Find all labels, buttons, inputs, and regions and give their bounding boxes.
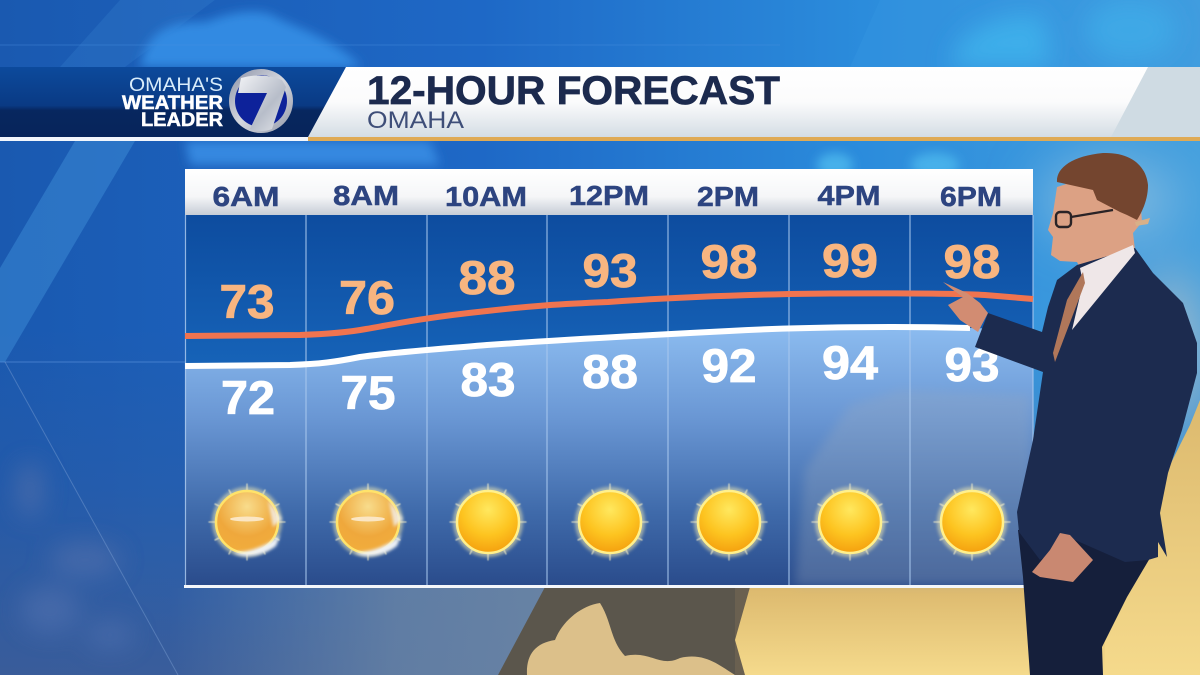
- title: 12-HOUR FORECAST: [367, 69, 780, 113]
- high temperatures: [220, 234, 1000, 328]
- table header: 6PM: [940, 181, 1002, 212]
- table header: 6AM: [212, 181, 280, 212]
- banner: station logo panel: [0, 67, 346, 141]
- high line: [185, 293, 1033, 336]
- presenter: lower hand: [1032, 533, 1093, 582]
- background: lower left clouds: [16, 462, 134, 649]
- low temperature band: [185, 327, 1033, 585]
- table header: 4PM: [818, 180, 880, 211]
- icon: sun 6PM: [934, 484, 1010, 560]
- presenter: earpiece: [1135, 218, 1150, 226]
- presenter: legs: [1018, 520, 1150, 675]
- presenter: shirt collar: [1072, 245, 1135, 330]
- table header: 2PM: [697, 181, 759, 212]
- presenter: suit jacket: [975, 248, 1197, 562]
- station logo text: OMAHA'S: [129, 75, 223, 96]
- low temperatures: 92: [702, 339, 756, 392]
- low temperatures: 72: [221, 371, 275, 424]
- background: gray lower band: [170, 588, 545, 675]
- low temperatures: 94: [822, 336, 878, 389]
- table header: 10AM: [445, 181, 527, 212]
- icon: sun 4PM: [812, 484, 888, 560]
- high temperature band: [185, 215, 1033, 366]
- icon: mostly sunny 8AM: [330, 484, 406, 560]
- low line: [185, 327, 970, 366]
- subtitle: OMAHA: [367, 107, 464, 134]
- low temperatures: 93: [944, 338, 1000, 391]
- icon: sun 10AM: [450, 484, 526, 560]
- low temperatures: 88: [582, 345, 638, 398]
- high temperatures: 73: [220, 275, 274, 328]
- high temperatures: 93: [582, 244, 638, 297]
- presenter: hair: [1057, 153, 1148, 220]
- table header: [185, 169, 1033, 215]
- icon: mostly sunny 6AM: [209, 484, 285, 560]
- presenter: pointing hand: [943, 282, 988, 332]
- banner: title panel: [308, 67, 1200, 137]
- cloud tint in band: [795, 390, 1033, 585]
- forecast table: [184, 169, 1033, 588]
- background: upper clouds: [140, 12, 440, 165]
- background: diagonal light stripes: [0, 141, 135, 362]
- bottom border: [184, 585, 1024, 588]
- presenter: face and neck: [1048, 175, 1142, 268]
- low temperatures: 75: [340, 366, 396, 419]
- table header: 12PM: [569, 180, 649, 211]
- channel 7 logo: [229, 69, 293, 133]
- high temperatures: 76: [339, 271, 395, 324]
- background: golden clouds: [498, 400, 1200, 675]
- presenter: tie: [1053, 272, 1085, 362]
- presenter: glasses: [1056, 210, 1113, 227]
- table header: 8AM: [333, 180, 399, 211]
- column dividers: [186, 215, 1033, 585]
- station logo text: LEADER: [141, 110, 223, 131]
- low temperatures: [221, 336, 1000, 424]
- icon: sun 12PM: [572, 484, 648, 560]
- lower third banner: [0, 67, 1200, 141]
- station logo text: WEATHER: [122, 93, 223, 114]
- high temperatures: 99: [822, 234, 878, 287]
- icon: sun 2PM: [691, 484, 767, 560]
- high temperatures: 98: [700, 235, 758, 288]
- high temperatures: 88: [458, 251, 516, 304]
- station logo text: [122, 75, 223, 131]
- background: right haze: [1040, 160, 1195, 430]
- low temperatures: 83: [460, 353, 516, 406]
- presenter: [943, 153, 1197, 675]
- high temperatures: 98: [944, 235, 1000, 288]
